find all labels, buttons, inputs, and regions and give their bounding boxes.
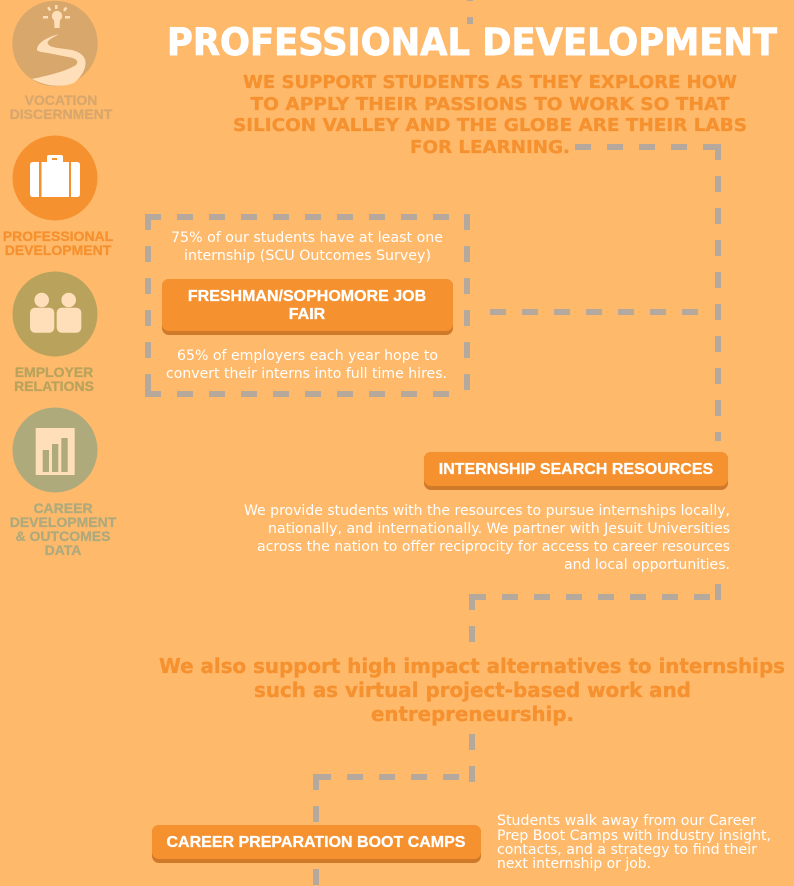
connector: job fair box to path xyxy=(490,309,698,315)
nav item: employer relations: RELATIONS xyxy=(14,378,94,394)
text: boot camps description: next internship or job. xyxy=(497,856,651,872)
text: employer statistic xyxy=(166,348,447,382)
text: internship resources description: across the nation to offer reciprocity for access to career resources xyxy=(257,539,730,555)
connector: intro to internship resources xyxy=(575,147,718,441)
icon: light bulb xyxy=(43,5,70,28)
text: internship statistic: internship (SCU Outcomes Survey) xyxy=(184,248,431,264)
intro text xyxy=(233,72,747,158)
text: boot camps description: Students walk away from our Career xyxy=(497,813,756,829)
text: employer statistic: convert their interns into full time hires. xyxy=(166,366,447,382)
icon: two people xyxy=(30,293,81,333)
text: internship resources description xyxy=(244,503,730,573)
nav item: professional development: DEVELOPMENT xyxy=(5,242,112,258)
connector: alternatives to boot camps xyxy=(316,734,472,822)
nav item: professional development: PROFESSIONAL xyxy=(3,228,114,244)
nav item: vocation discernment: VOCATION xyxy=(25,92,97,108)
text: internship statistic xyxy=(171,230,443,264)
button: career preparation boot camps xyxy=(152,825,481,863)
nav item: career development and outcomes data: DEVELOPMENT xyxy=(10,514,117,530)
nav item: career development and outcomes data: DATA xyxy=(45,542,81,558)
button: freshman sophomore job fair: FAIR xyxy=(289,306,326,323)
text: alternatives statement xyxy=(159,654,785,726)
intro text: FOR LEARNING. xyxy=(410,137,570,158)
text: alternatives statement: entrepreneurship. xyxy=(371,702,574,726)
text: employer statistic: 65% of employers each year hope to xyxy=(177,348,438,364)
connector: top stub xyxy=(467,0,473,24)
nav item: employer relations xyxy=(12,272,98,394)
text: internship resources description: We provide students with the resources to pursue internships locally, xyxy=(244,503,730,519)
nav item: vocation discernment: DISCERNMENT xyxy=(10,106,113,122)
nav item: career development and outcomes data: CAREER xyxy=(33,500,93,516)
connector: resources to alternatives xyxy=(472,584,718,642)
nav item: career development and outcomes data: & OUTCOMES xyxy=(16,528,110,544)
text: boot camps description xyxy=(497,813,771,872)
button: career preparation boot camps: CAREER PREPARATION BOOT CAMPS xyxy=(167,834,466,851)
text: internship resources description: and local opportunities. xyxy=(564,557,730,573)
icon: briefcase xyxy=(30,155,80,197)
text: boot camps description: contacts, and a strategy to find their xyxy=(497,842,757,858)
button: internship search resources xyxy=(424,452,728,490)
title: PROFESSIONAL DEVELOPMENT xyxy=(167,21,778,64)
nav item: vocation discernment xyxy=(10,1,113,122)
text: alternatives statement: We also support high impact alternatives to internships xyxy=(159,654,785,678)
intro text: TO APPLY THEIR PASSIONS TO WORK SO THAT xyxy=(250,94,730,115)
text: alternatives statement: such as virtual project-based work and xyxy=(254,678,691,702)
button: internship search resources: INTERNSHIP SEARCH RESOURCES xyxy=(439,461,714,478)
text: boot camps description: Prep Boot Camps with industry insight, xyxy=(497,828,771,844)
connector: bottom stub xyxy=(313,869,319,885)
icon: winding road xyxy=(32,34,86,86)
intro text: WE SUPPORT STUDENTS AS THEY EXPLORE HOW xyxy=(243,72,737,93)
text: internship statistic: 75% of our students have at least one xyxy=(171,230,443,246)
icon: bar chart document xyxy=(36,428,75,475)
panel: job fair dashed box xyxy=(148,214,467,394)
text: internship resources description: nationally, and internationally. We partner with Jesuit Universities xyxy=(268,521,730,537)
button: freshman sophomore job fair: FRESHMAN/SOPHOMORE JOB xyxy=(188,288,426,305)
intro text: SILICON VALLEY AND THE GLOBE ARE THEIR LABS xyxy=(233,115,747,136)
nav item: career development and outcomes data xyxy=(10,408,117,558)
button: freshman sophomore job fair xyxy=(162,279,453,335)
nav item: employer relations: EMPLOYER xyxy=(15,364,93,380)
nav item: professional development xyxy=(3,136,114,258)
